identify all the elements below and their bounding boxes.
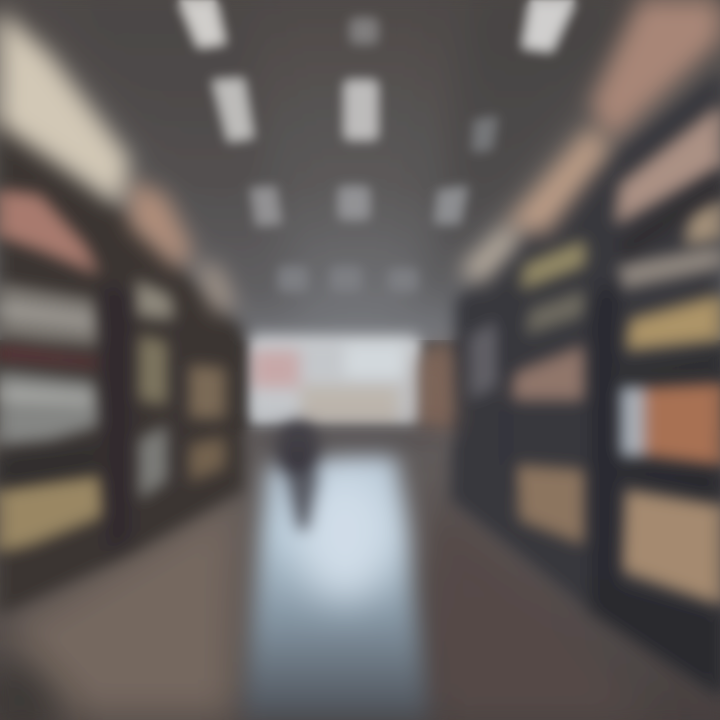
right shelf uprights [500,170,720,695]
left shelf goods [0,190,225,552]
left shelving [0,110,245,615]
right overhead beam [460,0,720,285]
ceiling lights [178,0,576,292]
left overhead beam [0,10,236,312]
right shelving [450,70,720,695]
warm panel beside back wall [420,340,455,430]
right shelf goods [470,105,720,605]
shopper silhouette [276,420,320,530]
distant shadow band [255,428,445,448]
floor [0,430,720,720]
left shelf uprights [0,285,184,555]
floor reflection [242,455,430,720]
back wall window [250,335,418,423]
ceiling [0,0,720,340]
